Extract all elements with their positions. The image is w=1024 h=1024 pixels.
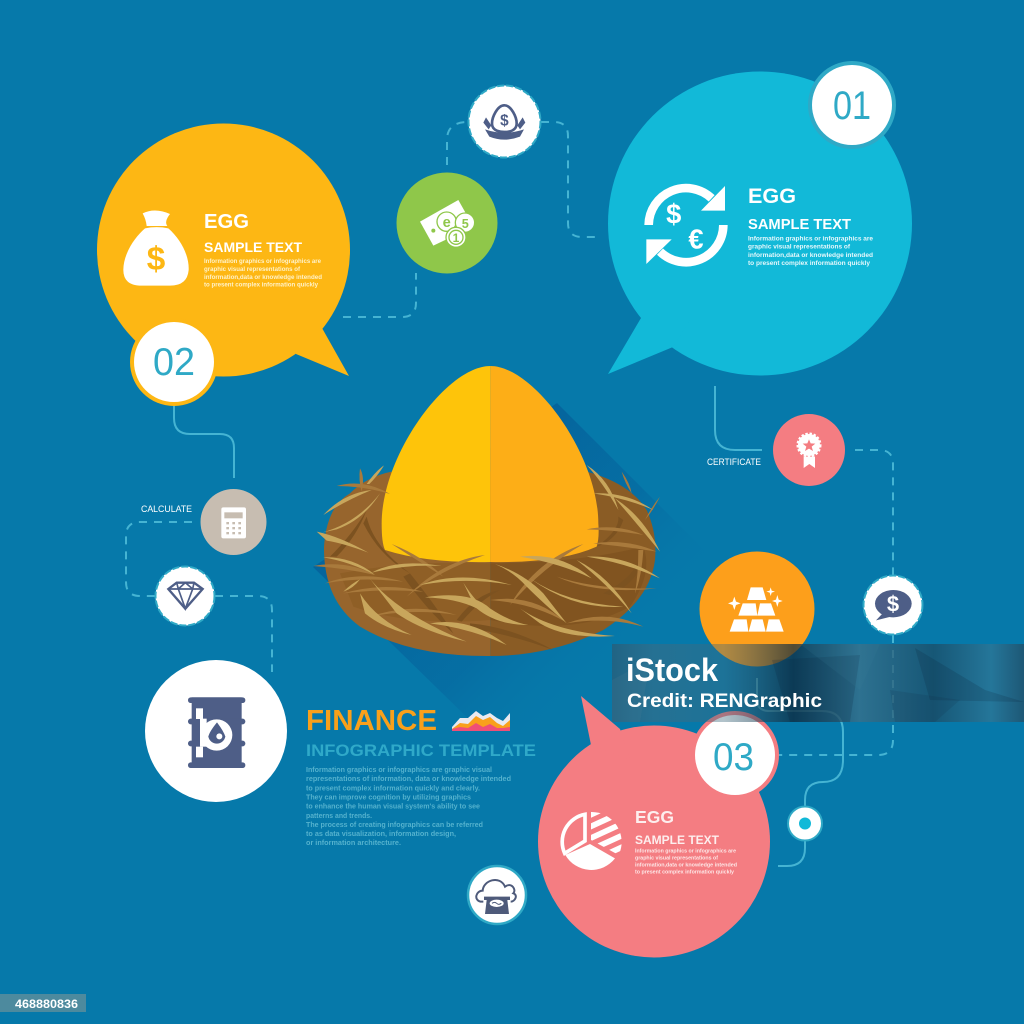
number badge 01: 01 (833, 84, 871, 128)
icon: green money circle: e (443, 215, 451, 231)
long shadow (313, 403, 740, 730)
body text: graphic visual representations of (748, 244, 851, 251)
body text: Information graphics or infographics are (204, 258, 321, 265)
panel: 03 pink speech bubble (538, 696, 779, 958)
subtitle: INFOGRAPHIC TEMPLATE (306, 741, 536, 760)
icon: egg emblem circle (468, 86, 540, 158)
icon: connector dot (788, 806, 822, 840)
description text: to as data visualization, information design, (306, 829, 456, 838)
description text: They can improve cognition by utilizing graphics (306, 792, 471, 802)
icon: certificate circle (773, 414, 845, 486)
heading: EGG (748, 185, 796, 208)
golden egg (382, 366, 599, 562)
stock watermark banner (612, 644, 1024, 722)
icon: cloud ATM circle (468, 866, 526, 924)
number badge 01 (808, 61, 896, 149)
panel: 02 yellow speech bubble (97, 124, 350, 406)
icon: dollar speech circle (864, 576, 922, 634)
icon: money bag (123, 210, 189, 286)
number badge 02 (130, 318, 218, 406)
icon: currency exchange arrows (646, 186, 725, 264)
label: certificate: CERTIFICATE (707, 457, 761, 468)
bubble shape (608, 72, 912, 376)
subheading: SAMPLE TEXT (635, 833, 720, 847)
icon: egg emblem circle: $ (500, 112, 509, 129)
body text: information,data or knowledge intended (204, 274, 322, 281)
number badge 03: 03 (713, 736, 754, 779)
straw strands (313, 465, 660, 650)
body text: to present complex information quickly (204, 282, 318, 288)
body text: to present complex information quickly (748, 260, 870, 267)
body text: to present complex information quickly (635, 870, 734, 876)
body text (204, 258, 322, 288)
body text: Information graphics or infographics are (748, 236, 873, 242)
connector lines (126, 122, 893, 866)
description text: to enhance the human visual system's ability to see (306, 802, 480, 810)
heading: EGG (635, 807, 674, 827)
icon: green money circle: 5 (462, 217, 469, 231)
watermark brand: iStock (626, 652, 718, 688)
body text: information,data or knowledge intended (635, 862, 737, 868)
icon: green money circle (396, 172, 498, 274)
body text: information,data or knowledge intended (748, 252, 873, 259)
body text (748, 236, 873, 267)
body text: Information graphics or infographics are (635, 848, 736, 854)
description text: The process of creating infographics can be referred (306, 820, 483, 829)
description text (306, 765, 511, 847)
subheading: SAMPLE TEXT (204, 239, 302, 255)
mini area chart (452, 711, 510, 731)
description text: or information architecture. (306, 838, 401, 847)
number badge 02: 02 (153, 341, 195, 384)
body text: graphic visual representations of (204, 266, 301, 273)
subheading: SAMPLE TEXT (748, 216, 851, 233)
icon: money bag: $ (147, 241, 166, 278)
label: calculate: CALCULATE (141, 504, 192, 514)
description text: patterns and trends. (306, 811, 372, 820)
icon: calculator circle (200, 489, 266, 555)
title block (306, 705, 536, 847)
icon: gold bars circle (700, 552, 814, 666)
description text: Information graphics or infographics are graphic visual (306, 765, 492, 774)
panel: 01 blue speech bubble (608, 61, 912, 376)
bubble shape (538, 726, 770, 958)
stock id tag (0, 994, 86, 1012)
watermark credit: Credit: RENGraphic (627, 691, 822, 712)
body text: graphic visual representations of (635, 856, 718, 862)
title: finance: FINANCE (306, 705, 437, 737)
bubble shape (97, 124, 350, 376)
body text (635, 848, 737, 876)
stock id tag: 468880836 (15, 999, 78, 1011)
icon: currency exchange arrows: $ (666, 198, 681, 229)
icon: currency exchange arrows: € (688, 223, 704, 254)
nest and egg illustration (313, 366, 740, 730)
heading: EGG (204, 211, 249, 233)
number badge 03 (691, 711, 779, 799)
icon: pie chart (560, 812, 622, 870)
icon: green money circle: 1 (453, 231, 460, 245)
description text: to present complex information quickly and clearly. (306, 784, 480, 792)
icon: diamond circle (156, 566, 214, 626)
description text: representations of information, data or knowledge intended (306, 774, 511, 783)
icon: dollar speech circle: $ (887, 592, 899, 617)
icon: oil barrel circle (145, 660, 287, 802)
nest (324, 472, 655, 656)
